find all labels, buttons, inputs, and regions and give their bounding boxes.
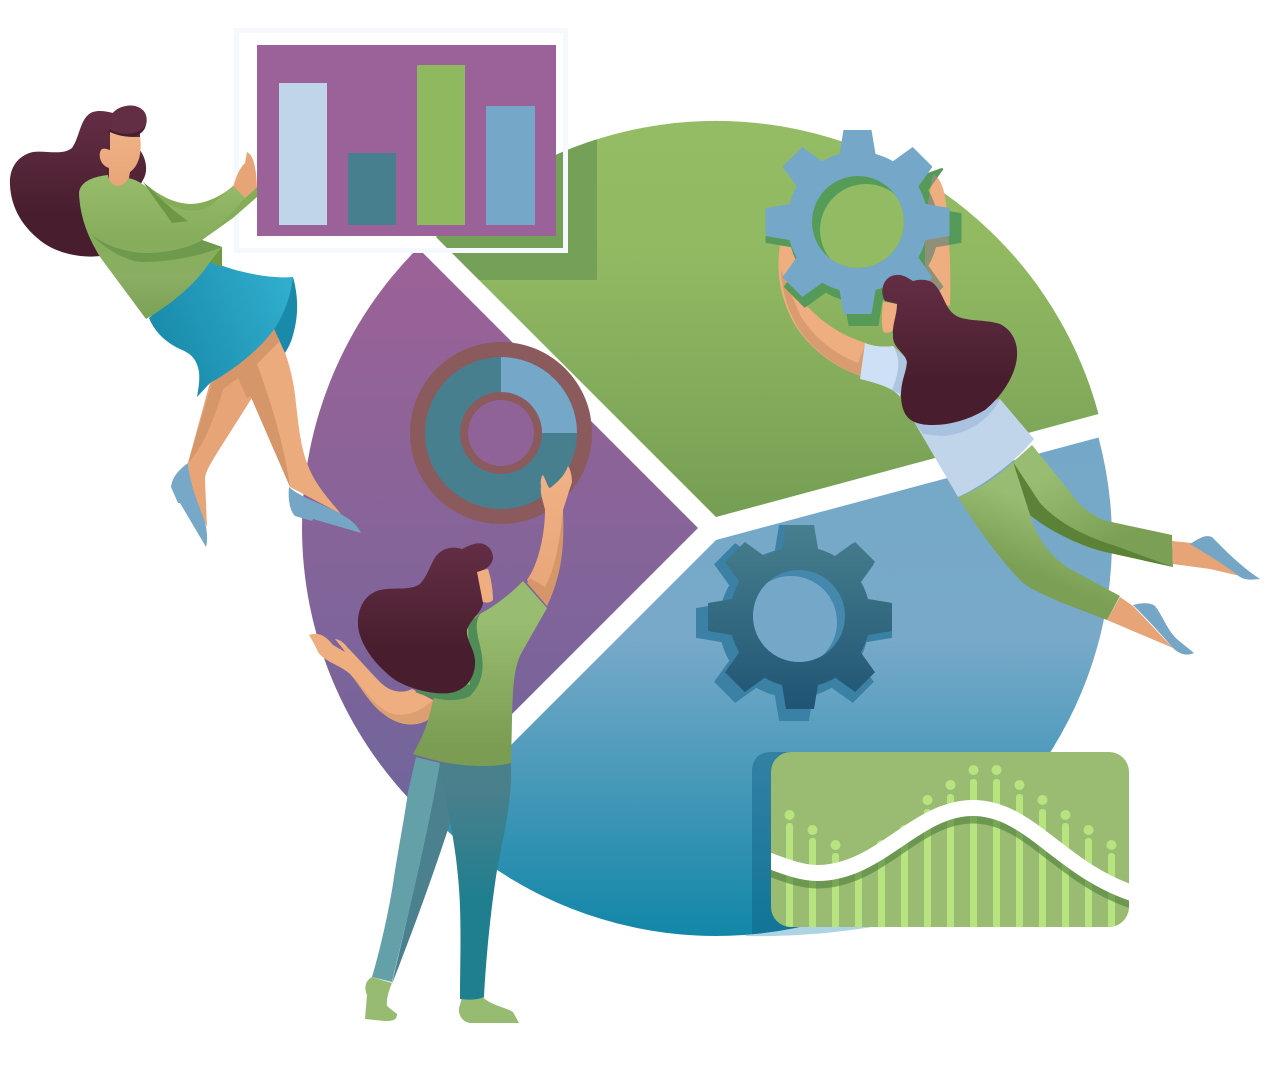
collar shadow — [415, 612, 483, 700]
left arm shade — [781, 270, 866, 376]
woman holding bar chart — [10, 106, 361, 547]
neck and face — [100, 132, 141, 188]
pie slice: blue — [436, 438, 1112, 936]
pie slice: green — [436, 121, 1098, 517]
sleeve — [860, 343, 907, 397]
right arm — [925, 174, 950, 306]
woman holding gear: arms behind gear — [778, 174, 950, 376]
hair fringe — [110, 106, 147, 135]
pie chart — [302, 120, 1112, 936]
right trouser leg — [440, 763, 511, 1000]
hair — [10, 111, 146, 257]
torso — [913, 399, 1034, 497]
shoes — [171, 463, 207, 547]
hand on board — [233, 152, 257, 198]
skirt back — [270, 277, 297, 353]
raised arm — [527, 466, 572, 606]
face — [477, 569, 493, 603]
left arm — [778, 235, 866, 376]
pale card shadow outside pie — [745, 915, 872, 936]
graph bars — [784, 765, 1116, 933]
back arm sleeve — [143, 182, 257, 240]
shirt — [413, 581, 547, 766]
hair — [358, 543, 493, 693]
upper leg — [1013, 445, 1173, 567]
card shadow — [752, 752, 799, 934]
line graph card — [752, 752, 1135, 940]
bar chart shadow on green slice — [436, 139, 597, 280]
hair — [882, 275, 1017, 425]
trouser shadow — [392, 763, 460, 984]
front leg — [240, 328, 341, 514]
graph line — [765, 808, 1135, 894]
face — [882, 302, 898, 333]
feet — [1172, 541, 1240, 576]
board frame — [236, 30, 566, 250]
bar chart board — [236, 30, 566, 250]
shoes — [1190, 536, 1260, 580]
board background — [257, 45, 556, 236]
graph line shadow — [765, 816, 1135, 902]
woman holding gear — [860, 275, 1260, 655]
feet — [365, 977, 397, 1021]
sweater folds — [143, 182, 188, 223]
sweater — [79, 175, 245, 319]
gear icon: blue — [766, 130, 961, 326]
lower leg — [958, 462, 1120, 620]
back leg — [188, 360, 255, 527]
card background — [771, 752, 1129, 927]
pie slice: purple — [302, 248, 698, 808]
left arm — [309, 634, 433, 724]
donut chart icon — [410, 342, 592, 524]
bars — [279, 65, 535, 225]
skirt — [149, 261, 293, 397]
leg shading — [212, 328, 290, 487]
woman holding donut — [309, 466, 572, 1023]
gear icon: dark blue — [696, 525, 892, 721]
leg fold — [1013, 462, 1173, 567]
left trouser leg — [372, 757, 440, 982]
